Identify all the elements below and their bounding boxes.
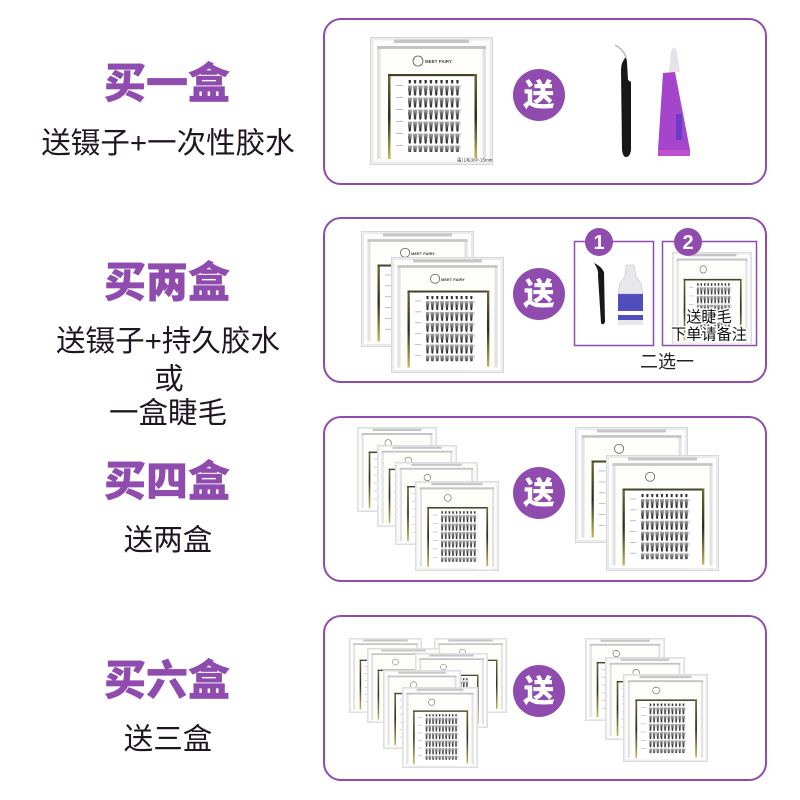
text: buy two gift — [56, 325, 280, 430]
panel: buy one — [324, 19, 766, 184]
note text — [671, 309, 747, 344]
gift badge: 送 — [522, 674, 554, 709]
option 1 — [574, 228, 654, 346]
small product box — [672, 252, 752, 345]
text: buy six gift: 送三盒 — [124, 723, 212, 756]
product box back — [361, 231, 474, 347]
heading: buy one: 买一盒 — [104, 60, 230, 107]
gift badge — [513, 69, 565, 121]
text: choose one: 二选一 — [640, 352, 694, 372]
gift badge — [513, 467, 565, 519]
text: buy two gift: 或 — [154, 363, 184, 396]
text: buy two gift: 一盒睫毛 — [109, 397, 227, 430]
panel: buy two — [324, 218, 766, 382]
product box front — [391, 257, 504, 373]
badge 2: 2 — [682, 232, 694, 254]
gift badge: 送 — [522, 476, 554, 511]
heading: buy two: 买两盒 — [104, 259, 230, 306]
panel: buy four — [324, 417, 766, 581]
badge 1: 1 — [593, 232, 605, 254]
free boxes — [575, 427, 719, 571]
icon: tweezers small — [594, 263, 605, 324]
text: buy two gift: 送镊子+持久胶水 — [56, 325, 280, 358]
text: buy four gift: 送两盒 — [124, 524, 212, 557]
note text: 送睫毛 — [686, 309, 732, 326]
note text: 下单请备注 — [671, 326, 747, 344]
gift badge: 送 — [522, 277, 554, 312]
gift badge — [513, 268, 565, 320]
icon: glue tube — [658, 48, 690, 156]
icon: glue bottle — [618, 265, 643, 325]
product box: MEET FAIRY — [425, 59, 452, 64]
gift badge — [513, 665, 565, 717]
product box back: MEET FAIRY — [411, 251, 435, 256]
gift badge: 送 — [522, 78, 554, 113]
heading: buy six: 买六盒 — [104, 657, 230, 704]
icon: tweezers — [615, 45, 631, 157]
panel: buy six — [324, 616, 766, 780]
product box — [370, 38, 493, 164]
product box: 蛋儿毛30P-15mm — [457, 156, 493, 164]
free boxes — [585, 638, 708, 762]
paid boxes — [349, 638, 507, 768]
product box front: MEET FAIRY — [441, 277, 465, 282]
heading: buy four: 买四盒 — [104, 458, 230, 505]
option 2 — [662, 228, 756, 346]
paid boxes — [357, 427, 499, 571]
text: buy one gift: 送镊子+一次性胶水 — [41, 127, 295, 160]
